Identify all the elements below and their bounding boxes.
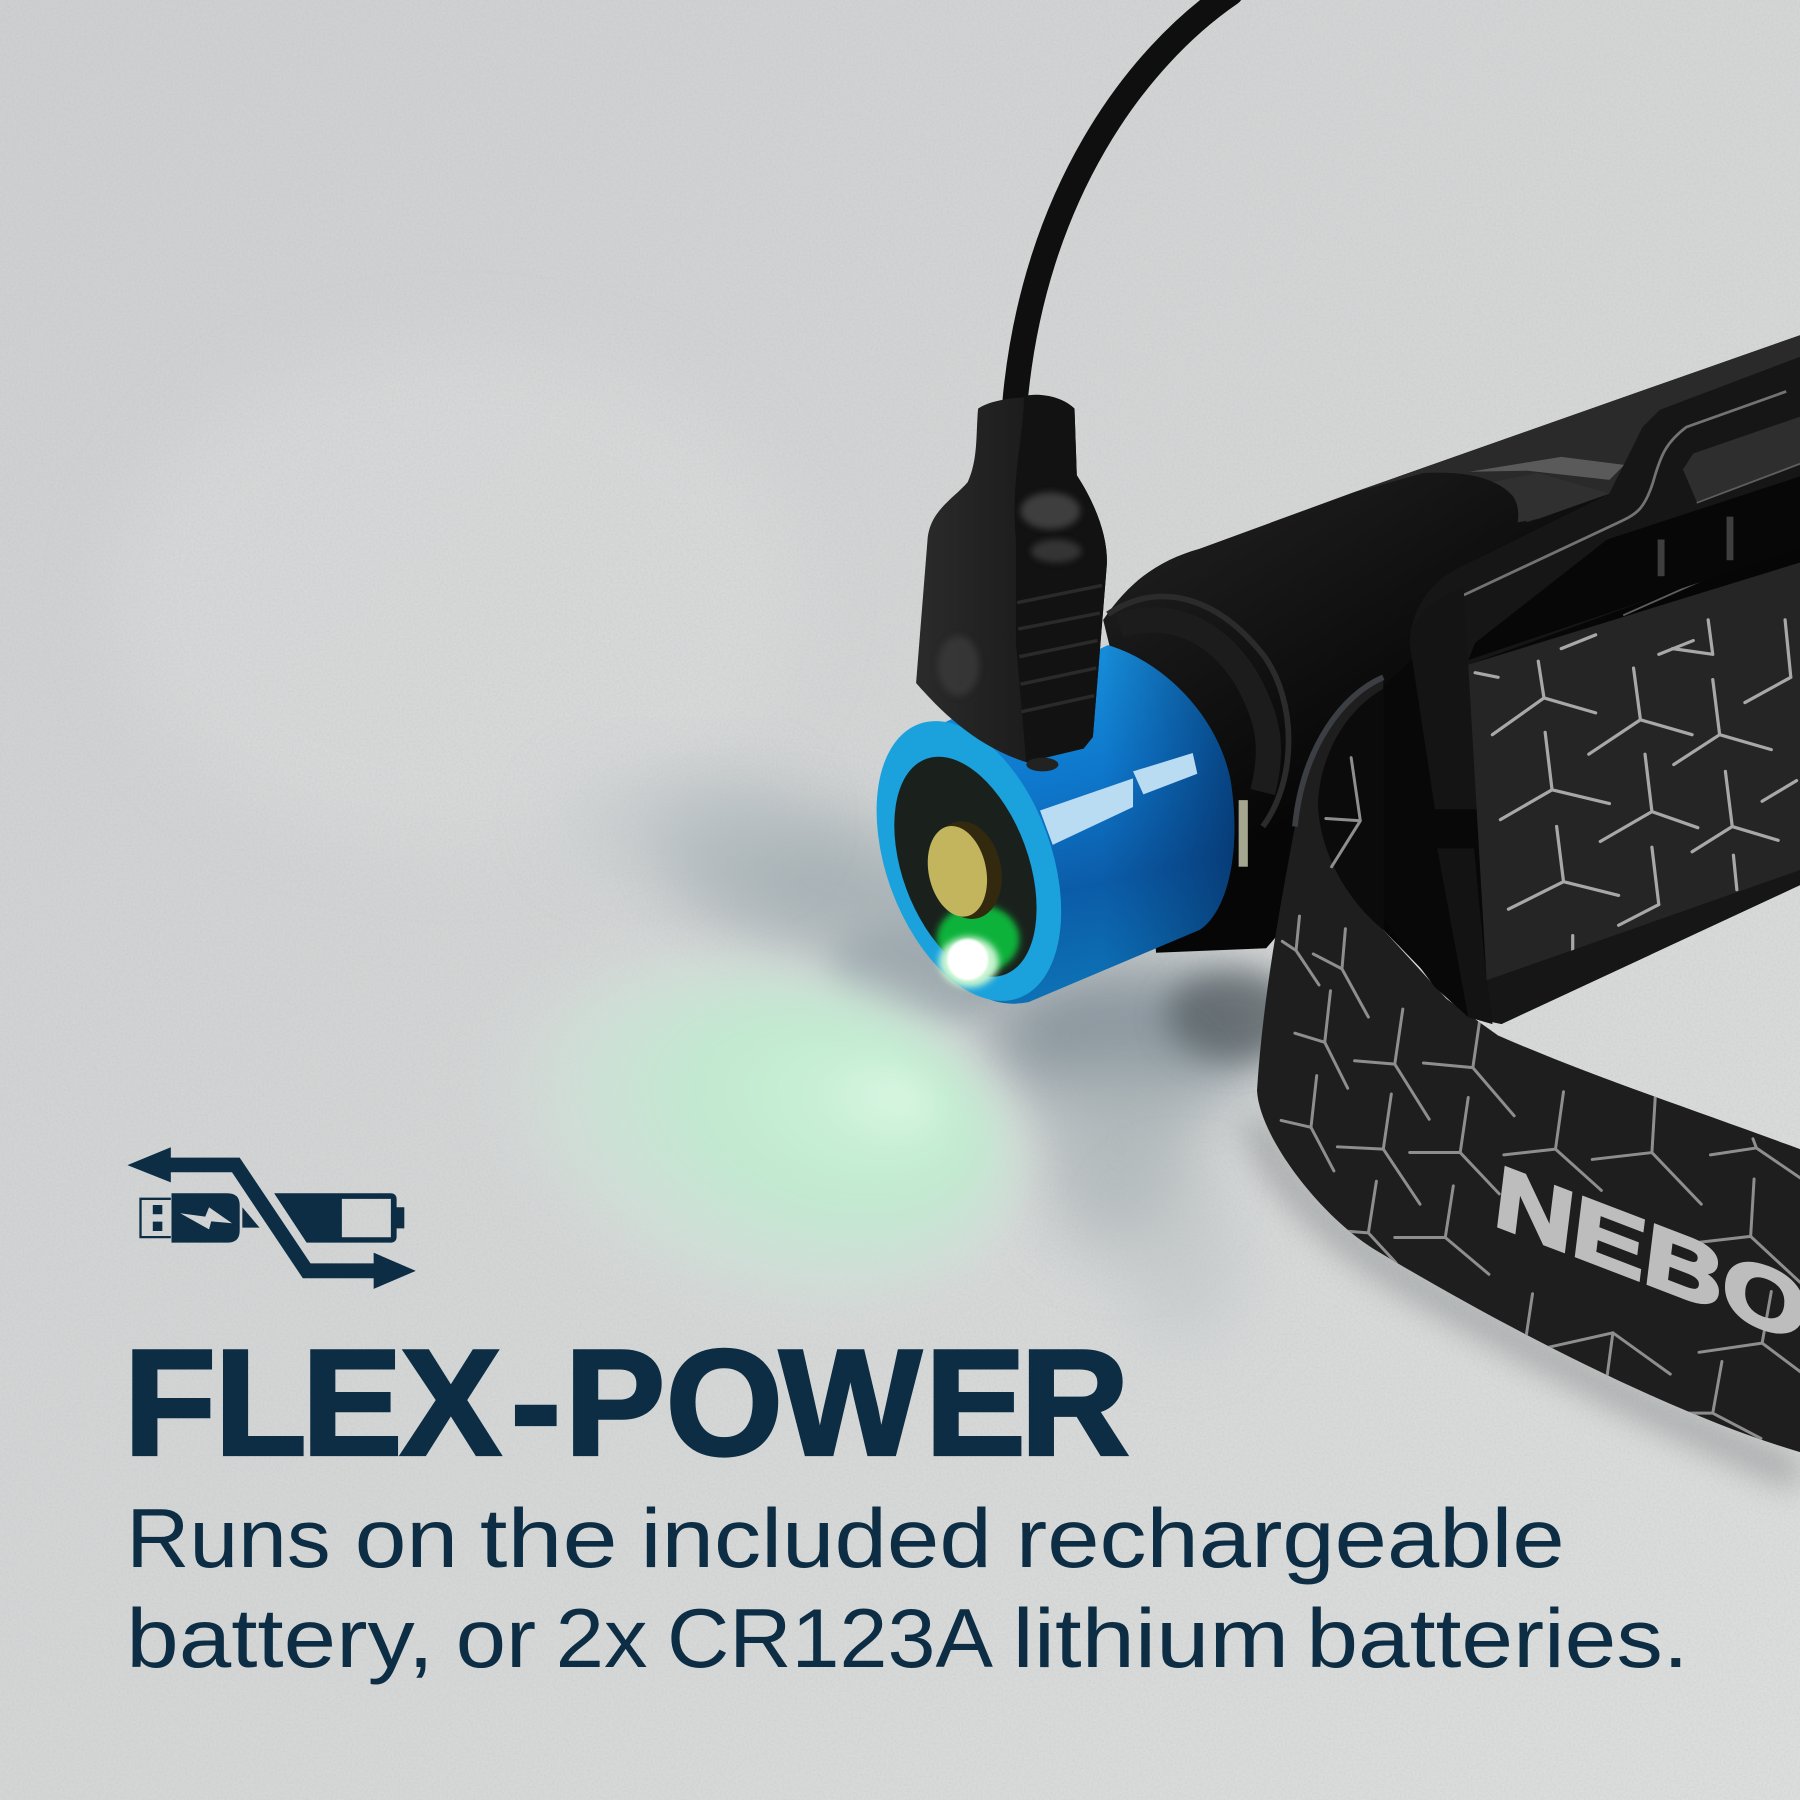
- body line 1: Runs: [126, 1491, 331, 1585]
- USB plug: [916, 395, 1107, 771]
- body line 1: rechargeable: [1016, 1491, 1565, 1585]
- body line 2: batteries.: [1306, 1591, 1689, 1685]
- frame lower arm over strap: [1383, 588, 1492, 1024]
- battery end ring: [841, 696, 1096, 1026]
- body line 1: [126, 1491, 1565, 1585]
- battery highlights: [1040, 753, 1197, 845]
- strap contact shadow: [1257, 1119, 1800, 1475]
- LED: [939, 937, 999, 987]
- headlamp housing: [1103, 335, 1800, 1024]
- battery dark face: [867, 737, 1064, 996]
- NEBO strap logo: NEBO: [1490, 1147, 1800, 1361]
- body line 1: the: [480, 1491, 618, 1585]
- body line 2: lithium: [1013, 1591, 1289, 1685]
- title: FLEX-POWER: [124, 1318, 1129, 1486]
- battery body: [914, 645, 1234, 1004]
- blue battery: [876, 645, 1234, 1004]
- icon: battery: [274, 1193, 404, 1243]
- strap Y pattern lower: [1281, 758, 1800, 1438]
- frame raised band: [1410, 357, 1800, 1024]
- charging cable: [1015, 0, 1231, 404]
- body line 1: on: [355, 1491, 458, 1585]
- cast shadow and green light beam: [426, 765, 1800, 1475]
- icon: USB and battery power: [127, 1147, 416, 1289]
- body line 2: 2x: [556, 1591, 647, 1685]
- body line 1: included: [641, 1491, 992, 1585]
- body line 2: or: [456, 1591, 536, 1685]
- gold contact: [920, 815, 1011, 926]
- collar rings: [1108, 596, 1289, 827]
- green glow on face: [937, 905, 1019, 973]
- upper strap panel: [1468, 562, 1800, 980]
- icon: USB plug: [172, 1193, 240, 1243]
- icon: bidirectional arrow: [127, 1147, 416, 1289]
- body line 2: battery,: [126, 1591, 434, 1685]
- body line 2: CR123A: [667, 1591, 993, 1685]
- body line 2: [126, 1591, 1689, 1685]
- strap Y pattern upper: [1475, 620, 1797, 959]
- body text: [126, 1491, 1689, 1685]
- lower head strap: [1257, 677, 1800, 1452]
